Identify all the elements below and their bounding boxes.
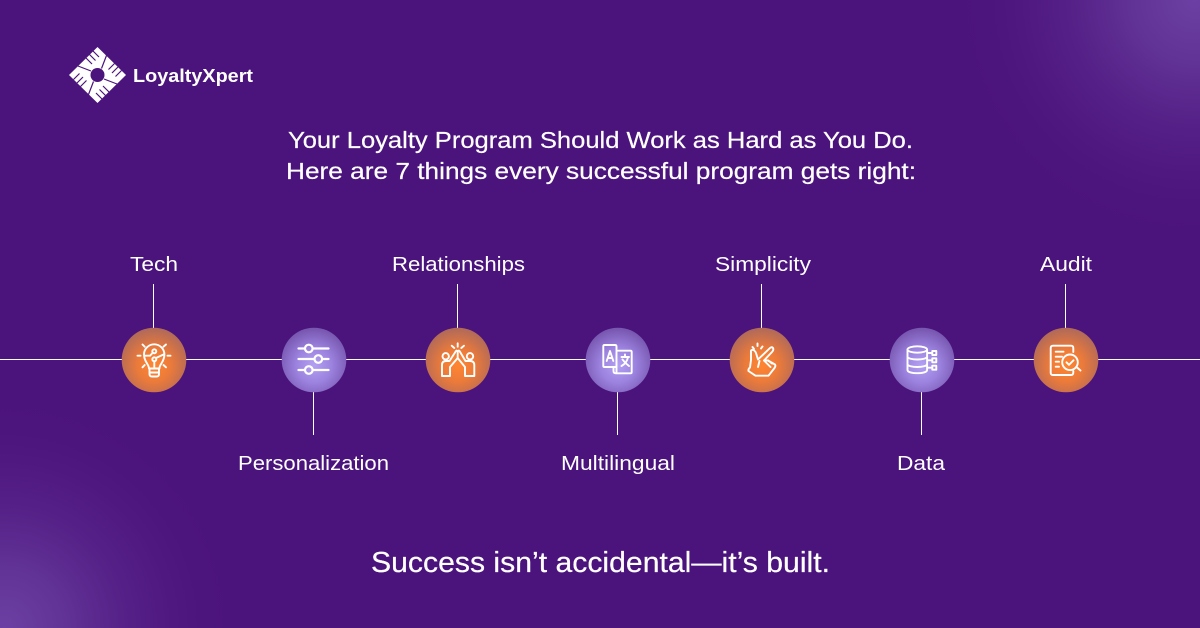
icon: sliders	[282, 328, 346, 392]
item: Tech	[122, 253, 186, 392]
icon: high five	[426, 328, 490, 392]
icon: database nodes	[890, 328, 954, 392]
label: Multilingual: Multilingual	[561, 452, 675, 475]
icon: document with magnifier	[1034, 328, 1098, 392]
logo wordmark: LoyaltyXpert	[133, 65, 253, 86]
logo	[69, 47, 253, 103]
heading: Your Loyalty Program Should Work as Hard as You Do.	[288, 127, 913, 153]
label: Data: Data	[897, 452, 946, 475]
icon: snapping fingers	[730, 328, 794, 392]
heading: Here are 7 things every successful program gets right:	[286, 158, 916, 184]
connectors	[153, 284, 1066, 435]
item: Simplicity	[715, 253, 812, 392]
item: Multilingual	[561, 328, 675, 475]
timeline line	[0, 359, 1200, 360]
icon: translation cards	[586, 328, 650, 392]
label: Tech: Tech	[130, 253, 178, 276]
label: Personalization: Personalization	[238, 452, 389, 475]
item: Audit	[1034, 253, 1098, 392]
closing line: Success isn’t accidental—it’s built.	[371, 547, 830, 579]
heading	[286, 127, 916, 184]
item: Relationships	[392, 253, 525, 392]
item: Data	[890, 328, 954, 475]
label: Relationships: Relationships	[392, 253, 525, 276]
item: Personalization	[238, 328, 389, 475]
icon: light bulb	[122, 328, 186, 392]
label: Simplicity: Simplicity	[715, 253, 812, 276]
icon: four linked hands	[69, 47, 126, 103]
label: Audit: Audit	[1040, 253, 1092, 276]
